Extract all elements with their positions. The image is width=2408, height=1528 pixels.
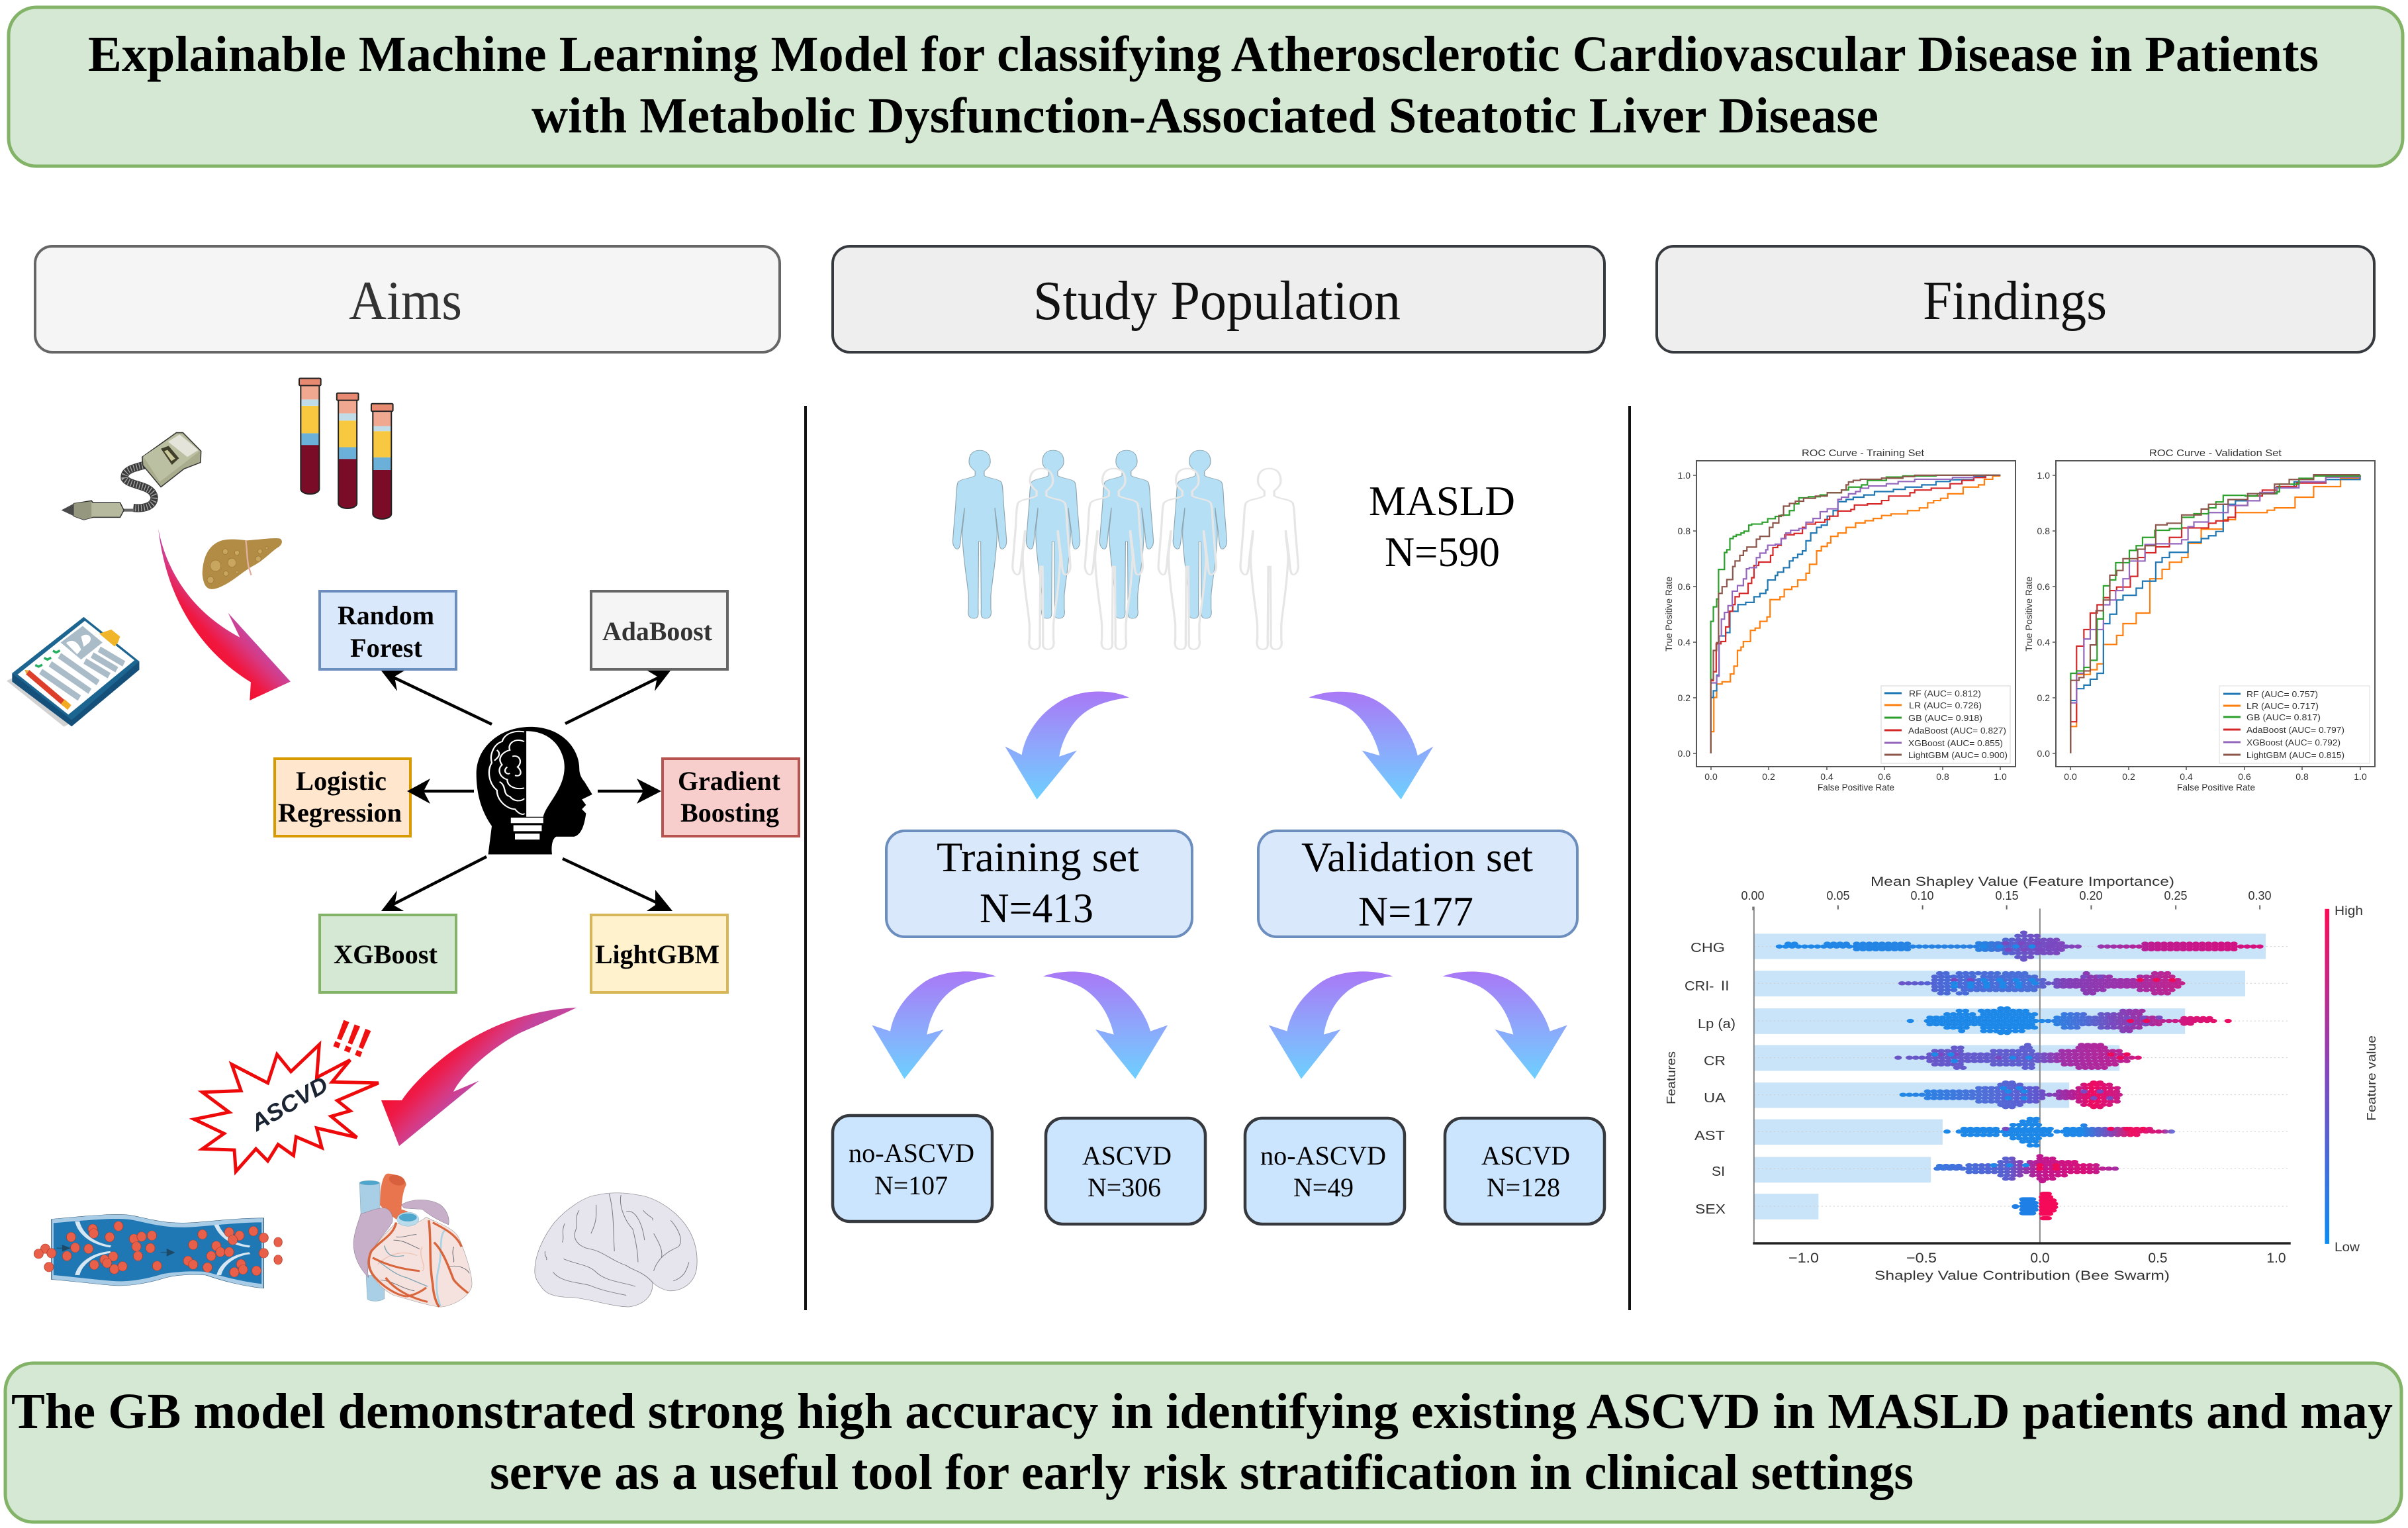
chart: ROC curve training set: 1.0: [1678, 470, 1690, 481]
legend: validation AUC: LightGBM (AUC= 0.815): [2246, 750, 2344, 760]
chart: SHAP beeswarm: Shapley Value Contribution (Bee Swarm): [1875, 1269, 2170, 1283]
chart: ROC curve validation set: 0.8: [2295, 771, 2309, 782]
model box: LightGBM: LightGBM: [595, 939, 719, 969]
chart: SHAP beeswarm: UA: [1704, 1091, 1726, 1106]
model box: XGBoost: XGBoost: [334, 939, 438, 969]
box: validation ASCVD: [1445, 1118, 1604, 1224]
arrow: to training ASCVD: [1043, 972, 1168, 1079]
chart: ROC curve training set: 0.6: [1878, 771, 1891, 782]
model box: XGBoost: [320, 915, 456, 992]
chart: SHAP beeswarm: 1.0: [2266, 1251, 2286, 1266]
chart: ROC curve training set: 0.8: [1936, 771, 1949, 782]
chart: ROC curve validation set: 0.2: [2037, 692, 2050, 703]
box: training set: N=413: [980, 884, 1093, 931]
box: training set: [886, 831, 1192, 937]
icon: brain: [535, 1193, 697, 1307]
model box: Gradient Boosting: Gradient: [678, 766, 781, 796]
text: MASLD N=590: MASLD: [1369, 477, 1515, 524]
legend: training AUC: [1881, 686, 2010, 763]
heading: Findings: Findings: [1923, 270, 2107, 332]
conclusion banner: The GB model demonstrated strong high accuracy in identifying existing ASCVD in MASLD patients and may: [11, 1384, 2393, 1439]
title banner: with Metabolic Dysfunction-Associated Steatotic Liver Disease: [532, 88, 1878, 144]
chart: SHAP beeswarm: AST: [1694, 1129, 1725, 1143]
chart: SHAP beeswarm: Low: [2335, 1241, 2360, 1255]
chart: ROC curve validation set: 0.2: [2122, 771, 2135, 782]
box: training no-ASCVD: no-ASCVD: [849, 1138, 974, 1168]
chart: SHAP beeswarm: SEX: [1695, 1202, 1726, 1217]
model box: Gradient Boosting: Boosting: [680, 798, 779, 828]
model box: Random Forest: [320, 591, 456, 669]
chart: SHAP beeswarm: −0.5: [1906, 1251, 1937, 1266]
chart: SHAP beeswarm: 0.0: [2030, 1251, 2050, 1266]
icon: ASCVD alert burst: !!!: [326, 1011, 378, 1067]
chart: SHAP beeswarm: Lp (a): [1698, 1017, 1736, 1031]
chart: ROC curve validation set: ROC Curve - Validation Set: [2149, 448, 2282, 459]
chart: SHAP beeswarm: 0.25: [2164, 889, 2188, 902]
chart: SHAP beeswarm: SI: [1712, 1165, 1725, 1179]
panel: study population: [833, 450, 1604, 1224]
legend: training AUC: GB (AUC= 0.918): [1908, 713, 1982, 723]
icon: blood tubes: [299, 378, 393, 519]
arrows: head to models: [381, 671, 672, 911]
chart: SHAP beeswarm: [1665, 875, 2378, 1283]
text: MASLD N=590: N=590: [1385, 528, 1500, 575]
chart: ROC curve training set: False Positive Rate: [1818, 782, 1894, 792]
model box: Random Forest: Random: [338, 600, 434, 630]
box: validation ASCVD: N=128: [1487, 1172, 1560, 1202]
chart: ROC curve validation set: 0.6: [2037, 581, 2050, 592]
conclusion banner: [5, 1363, 2401, 1522]
chart: ROC curve validation set: 0.4: [2037, 637, 2050, 647]
chart: ROC curve training set: 0.2: [1678, 692, 1690, 703]
heading: Study Population: Study Population: [1033, 270, 1401, 332]
icon: population figures: [952, 450, 1298, 649]
heading: Aims: [35, 246, 780, 352]
box: training no-ASCVD: N=107: [874, 1170, 948, 1200]
chart: ROC curve validation set: 0.6: [2238, 771, 2251, 782]
box: validation set: Validation set: [1301, 834, 1533, 881]
arrow: inputs to models: [158, 528, 291, 700]
chart: SHAP beeswarm: 0.15: [1995, 889, 2019, 902]
box: training ASCVD: ASCVD: [1082, 1141, 1172, 1170]
box: validation no-ASCVD: [1245, 1118, 1405, 1224]
model box: AdaBoost: [591, 591, 727, 669]
icon: ASCVD alert burst: ASCVD: [246, 1072, 332, 1137]
heading: Aims: Aims: [349, 270, 462, 332]
chart: ROC curve training set: 0.6: [1678, 581, 1690, 592]
chart: ROC curve training set: 0.4: [1678, 637, 1690, 647]
chart: SHAP beeswarm: 0.10: [1910, 889, 1934, 902]
model box: AdaBoost: AdaBoost: [602, 616, 713, 646]
box: validation no-ASCVD: N=49: [1293, 1172, 1354, 1202]
chart: ROC curve validation set: [2023, 448, 2375, 792]
chart: ROC curve training set: 1.0: [1994, 771, 2007, 782]
box: validation no-ASCVD: no-ASCVD: [1260, 1141, 1386, 1170]
chart: ROC curve training set: 0.0: [1704, 771, 1718, 782]
box: training ASCVD: N=306: [1088, 1172, 1161, 1202]
chart: SHAP beeswarm: CRI- Ⅱ: [1685, 979, 1732, 994]
chart: SHAP beeswarm: Features: [1665, 1051, 1678, 1104]
icon: clipboard report: [7, 617, 139, 727]
chart: SHAP beeswarm: High: [2335, 904, 2363, 918]
legend: validation AUC: LR (AUC= 0.717): [2246, 701, 2319, 711]
arrow: to training no-ASCVD: [872, 971, 996, 1079]
chart: ROC curve validation set: 0.8: [2037, 526, 2050, 536]
legend: training AUC: AdaBoost (AUC= 0.827): [1908, 726, 2006, 736]
legend: validation AUC: AdaBoost (AUC= 0.797): [2246, 725, 2344, 735]
chart: ROC curve validation set: True Positive Rate: [2023, 577, 2034, 651]
chart: SHAP beeswarm: 0.00: [1741, 889, 1765, 902]
box: validation set: N=177: [1358, 888, 1473, 935]
icon: heart with coronary arteries: [353, 1172, 472, 1307]
legend: validation AUC: RF (AUC= 0.757): [2246, 689, 2318, 699]
chart: SHAP beeswarm: CR: [1704, 1054, 1726, 1069]
chart: ROC curve validation set: False Positive Rate: [2177, 782, 2255, 792]
arrow: to validation no-ASCVD: [1269, 971, 1393, 1079]
legend: training AUC: LightGBM (AUC= 0.900): [1908, 750, 2008, 760]
model box: Random Forest: Forest: [350, 633, 423, 663]
arrow: models to outcomes: [381, 1008, 577, 1146]
icon: stenotic blood vessel: [34, 1214, 282, 1288]
arrow: to validation set: [1309, 692, 1434, 800]
panel: aims: [7, 378, 799, 1307]
chart: SHAP beeswarm: 0.20: [2079, 889, 2103, 902]
legend: training AUC: RF (AUC= 0.812): [1909, 689, 1981, 698]
chart: ROC curve training set: 0.8: [1678, 526, 1690, 536]
title banner: [9, 7, 2403, 166]
chart: SHAP beeswarm: 0.5: [2148, 1251, 2168, 1266]
legend: training AUC: LR (AUC= 0.726): [1909, 700, 1982, 710]
chart: ROC curve validation set: 1.0: [2354, 771, 2367, 782]
model box: Logistic Regression: [275, 759, 410, 836]
box: training ASCVD: [1046, 1118, 1205, 1224]
legend: training AUC: XGBoost (AUC= 0.855): [1908, 738, 2003, 748]
chart: ROC curve validation set: 0.0: [2037, 748, 2050, 759]
icon: head with brain: [477, 727, 592, 854]
legend: validation AUC: XGBoost (AUC= 0.792): [2246, 738, 2340, 747]
chart: ROC curve training set: [1663, 448, 2015, 792]
legend: validation AUC: GB (AUC= 0.817): [2246, 712, 2321, 722]
heading: Findings: [1657, 246, 2374, 352]
chart: SHAP beeswarm: −1.0: [1788, 1251, 1819, 1266]
heading: Study Population: [833, 246, 1604, 352]
chart: SHAP beeswarm: 0.05: [1826, 889, 1850, 902]
conclusion banner: serve as a useful tool for early risk stratification in clinical settings: [490, 1445, 1914, 1500]
model box: Logistic Regression: Logistic: [296, 766, 387, 796]
chart: SHAP beeswarm: CHG: [1690, 941, 1725, 955]
arrow: to validation ASCVD: [1442, 972, 1567, 1079]
icon: fatty liver: [203, 538, 282, 589]
box: validation ASCVD: ASCVD: [1481, 1141, 1570, 1170]
model box: Logistic Regression: Regression: [278, 798, 402, 828]
chart: ROC curve validation set: 0.4: [2180, 771, 2193, 782]
title banner: Explainable Machine Learning Model for classifying Atherosclerotic Cardiovascular Disease in Patients: [88, 26, 2319, 82]
text: MASLD N=590: [1369, 477, 1515, 575]
chart: SHAP beeswarm: 0.30: [2248, 889, 2272, 902]
box: validation set: [1258, 831, 1577, 937]
chart: SHAP beeswarm: Feature value: [2365, 1035, 2378, 1121]
panel: findings: [1663, 448, 2378, 1283]
chart: ROC curve training set: 0.4: [1820, 771, 1833, 782]
chart: ROC curve validation set: 1.0: [2037, 470, 2050, 481]
chart: ROC curve training set: ROC Curve - Training Set: [1802, 448, 1925, 459]
model box: LightGBM: [591, 915, 727, 992]
chart: ROC curve training set: 0.0: [1678, 748, 1690, 759]
chart: SHAP beeswarm: Mean Shapley Value (Feature Importance): [1871, 875, 2174, 889]
legend: validation AUC: [2219, 686, 2370, 763]
icon: ASCVD alert burst: [194, 1011, 379, 1171]
chart: ROC curve training set: True Positive Rate: [1663, 577, 1674, 651]
chart: ROC curve training set: 0.2: [1762, 771, 1775, 782]
box: training set: Training set: [937, 834, 1139, 881]
model box: Gradient Boosting: [663, 759, 799, 836]
arrow: to training set: [1005, 691, 1129, 800]
box: training no-ASCVD: [833, 1116, 992, 1221]
chart: ROC curve validation set: 0.0: [2064, 771, 2077, 782]
icon: ultrasound device: [62, 433, 201, 520]
